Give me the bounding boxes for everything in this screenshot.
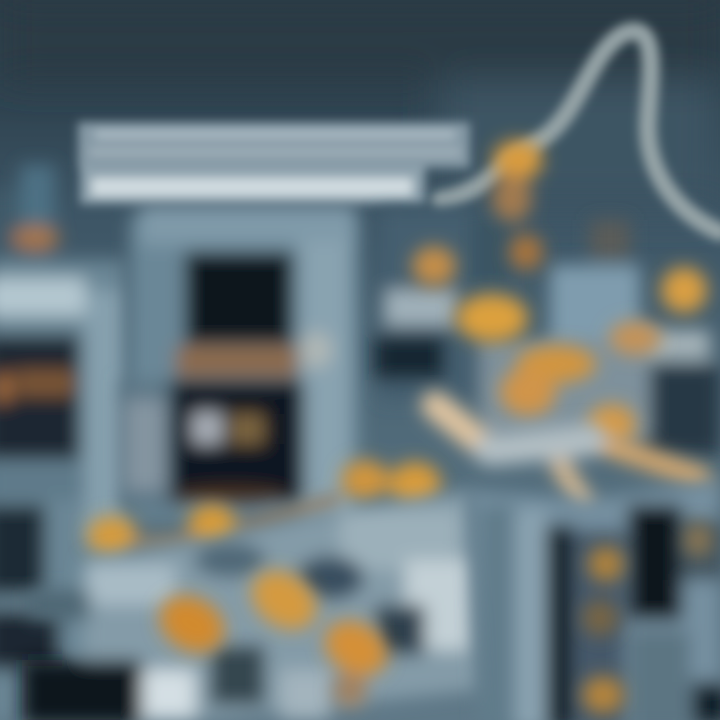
scattered coins right xyxy=(412,140,707,444)
left building xyxy=(0,165,125,720)
title plate xyxy=(78,122,470,204)
coins along centre xyxy=(87,460,441,556)
right foreground tower xyxy=(470,480,720,720)
tower window lights xyxy=(582,523,713,714)
line chart curve xyxy=(440,31,720,232)
bright diagonal bands xyxy=(435,405,700,505)
background glow xyxy=(0,0,720,210)
lower coins xyxy=(150,559,397,707)
lower rubble platform xyxy=(22,490,480,720)
right mid buildings xyxy=(375,210,720,455)
central tower xyxy=(120,205,360,520)
